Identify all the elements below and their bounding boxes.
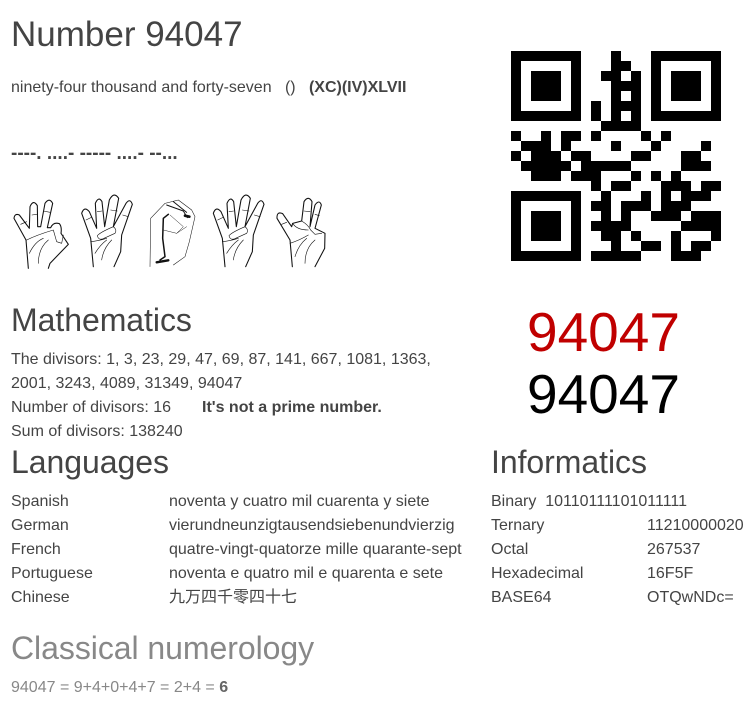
big number in black: 94047 (527, 363, 680, 425)
morse code: ----. ....- ----- ....- --... (11, 143, 178, 164)
panel: mathematics text (11, 351, 431, 440)
panel: informatics table: Hexadecimal (491, 565, 583, 582)
panel: informatics table: 267537 (647, 541, 700, 558)
number of divisors and prime status: Number of divisors: 16 (11, 399, 171, 416)
panel: languages table: noventa e quatro mil e quarenta e sete (169, 565, 443, 582)
panel: languages table: Portuguese (11, 565, 93, 582)
panel: informatics table: Octal (491, 541, 528, 558)
number of divisors and prime status (11, 399, 382, 416)
panel: languages table: quatre-vingt-quatorze mille quarante-sept (169, 541, 462, 558)
panel: informatics table: BASE64 (491, 589, 551, 606)
panel: informatics table: Ternary (491, 517, 544, 534)
panel: informatics table: OTQwNDc= (647, 589, 734, 606)
panel: languages table: 九万四千零四十七 (169, 589, 297, 606)
panel: informatics table: Binary 10110111101011111 (491, 493, 687, 510)
heading: informatics: Informatics (491, 444, 647, 480)
icon: sign language hands (13, 194, 326, 269)
panel: informatics table (491, 493, 744, 606)
divisors list (11, 351, 431, 392)
number of divisors and prime status: It's not a prime number. (202, 399, 382, 416)
panel: languages table: Chinese (11, 589, 70, 606)
numerology sum: 94047 = 9+4+0+4+7 = 2+4 = 6 (11, 679, 228, 696)
panel: languages table: noventa y cuatro mil cuarenta y siete (169, 493, 430, 510)
QR code (511, 51, 721, 261)
panel: languages table: French (11, 541, 61, 558)
heading: mathematics: Mathematics (11, 302, 192, 338)
panel: languages table: vierundneunzigtausendsiebenundvierzig (169, 517, 455, 534)
heading: languages: Languages (11, 444, 169, 480)
sum of divisors: Sum of divisors: 138240 (11, 423, 183, 440)
number name and roman numeral: ninety-four thousand and forty-seven () (XC)(IV)XLVII (11, 79, 406, 96)
big number in red: 94047 (527, 301, 680, 363)
panel: informatics table: 11210000020 (647, 517, 744, 534)
panel: informatics table: 16F5F (647, 565, 693, 582)
divisors list: The divisors: 1, 3, 23, 29, 47, 69, 87, 141, 667, 1081, 1363, (11, 351, 431, 368)
divisors list: 2001, 3243, 4089, 31349, 94047 (11, 375, 242, 392)
title: Number 94047 (11, 15, 243, 54)
panel: languages table: Spanish (11, 493, 69, 510)
panel: languages table: German (11, 517, 69, 534)
panel: languages table (11, 493, 462, 606)
heading: classical numerology: Classical numerology (11, 630, 314, 666)
